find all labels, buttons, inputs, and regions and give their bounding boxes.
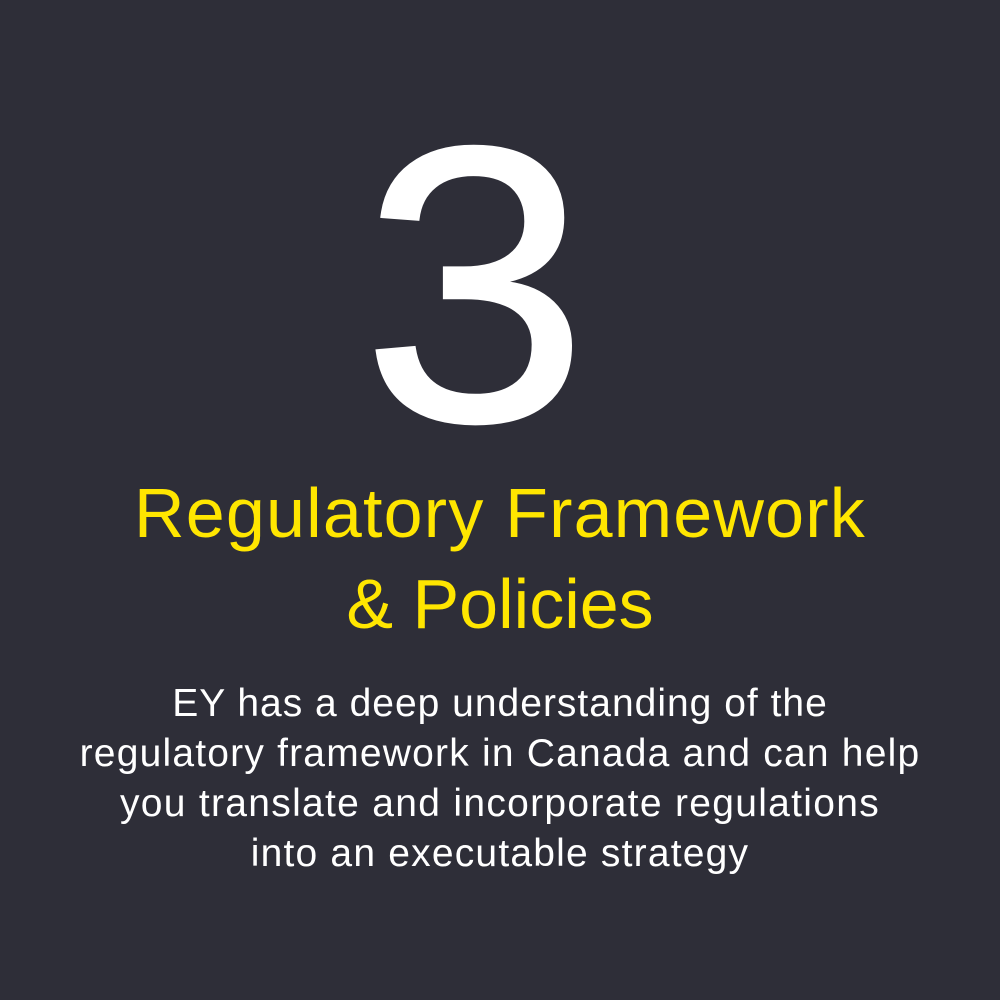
body text: you translate and incorporate regulations xyxy=(120,782,880,825)
body text xyxy=(80,682,920,875)
big number 3: 3 xyxy=(362,65,588,503)
body text: into an executable strategy xyxy=(251,832,749,875)
heading xyxy=(134,474,866,643)
heading: & Policies xyxy=(346,565,654,643)
body text: regulatory framework in Canada and can help xyxy=(80,732,920,775)
body text: EY has a deep understanding of the xyxy=(172,682,828,725)
heading: Regulatory Framework xyxy=(134,474,866,552)
